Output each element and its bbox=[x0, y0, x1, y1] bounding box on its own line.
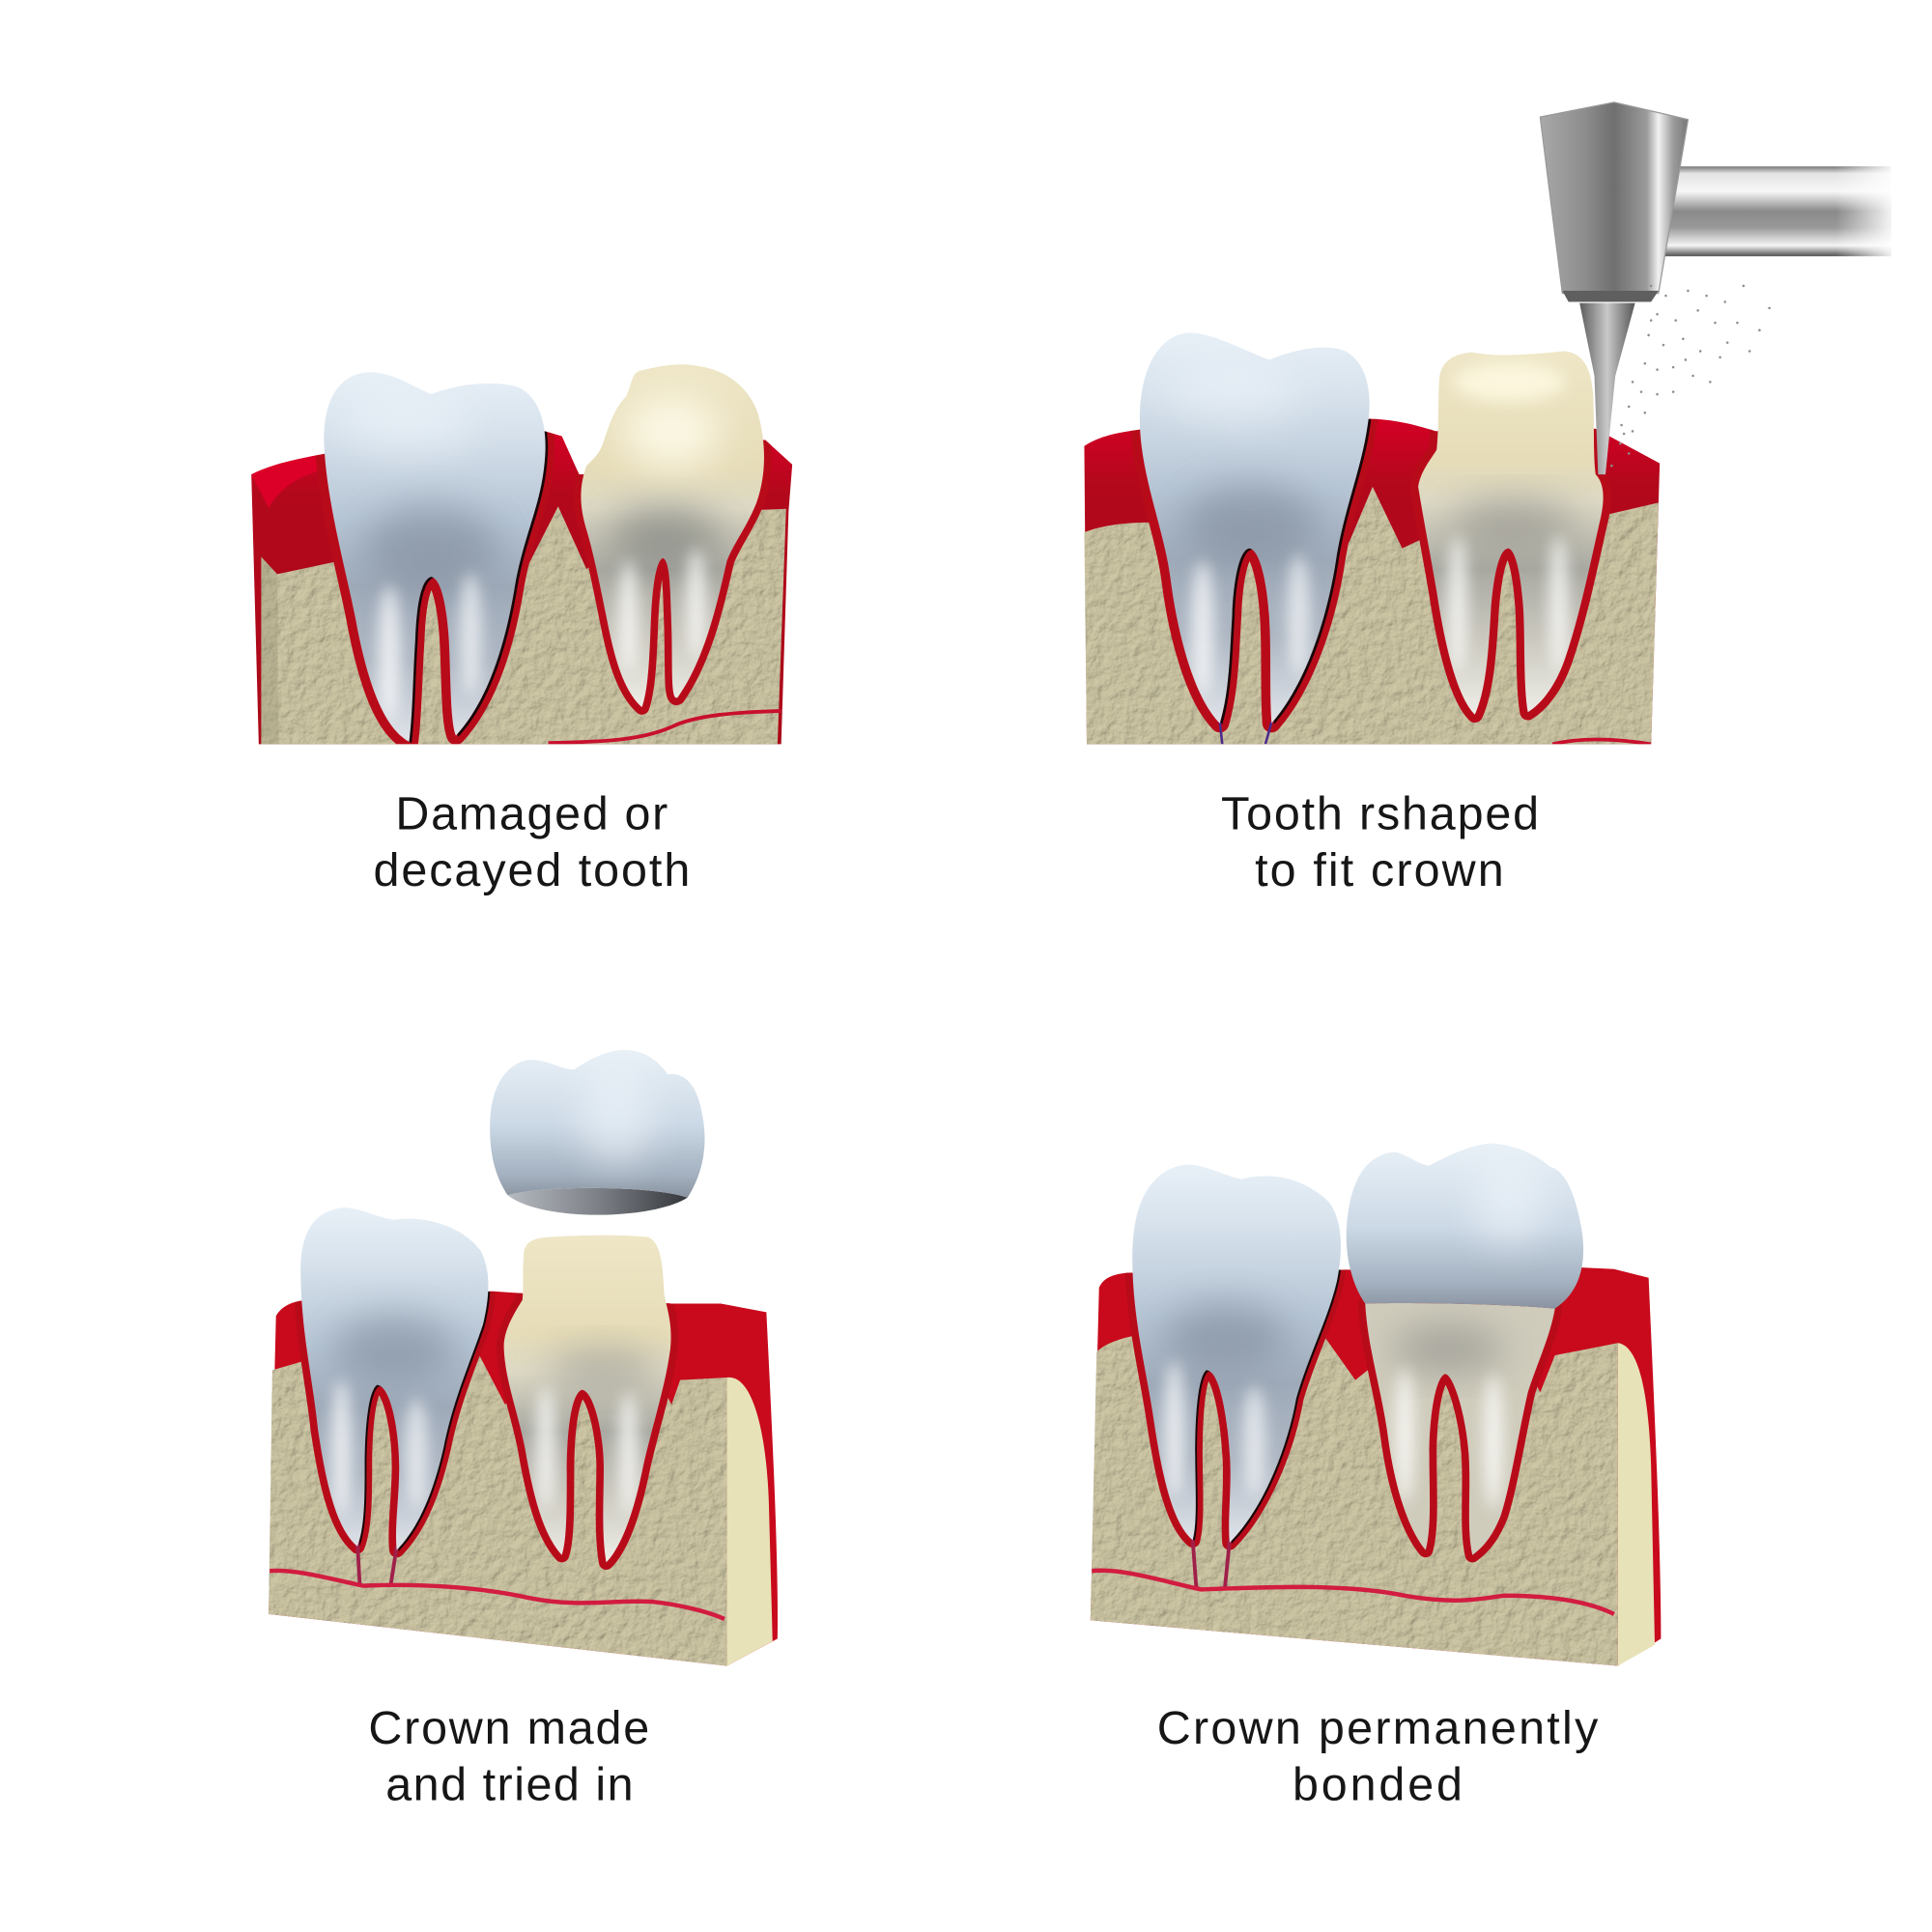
nerve line bbox=[1092, 1571, 1614, 1614]
caption: damaged or decayed tooth bbox=[373, 787, 690, 896]
panel: crown permanently bonded bbox=[1091, 1144, 1661, 1665]
jaw bone bbox=[261, 506, 786, 744]
bone side face bbox=[727, 1378, 773, 1665]
icon: dental drill bbox=[1540, 102, 1897, 474]
healthy molar bbox=[1140, 332, 1370, 724]
caption: tooth reshaped bbox=[1221, 787, 1539, 896]
gum block bbox=[1091, 1266, 1661, 1665]
socket lining bbox=[1130, 419, 1652, 744]
drill arm bbox=[1658, 166, 1891, 256]
socket lining bbox=[270, 1291, 725, 1621]
jaw bone bbox=[269, 1353, 727, 1665]
caption: tooth reshaped: to fit crown bbox=[1255, 844, 1504, 896]
drill burr bbox=[1579, 303, 1635, 474]
healthy molar bbox=[300, 1208, 488, 1550]
caption: crown permanently bonded: Crown permanently bbox=[1157, 1702, 1599, 1754]
infographic canvas bbox=[251, 101, 1891, 1801]
bone side face bbox=[1618, 1343, 1655, 1665]
gum block bbox=[269, 1292, 778, 1665]
caption: tooth reshaped: Tooth rshaped bbox=[1221, 787, 1539, 839]
nerve line bbox=[269, 1571, 724, 1619]
bonded crown bbox=[1347, 1144, 1583, 1309]
caption: crown permanently bonded: bonded bbox=[1293, 1759, 1463, 1811]
bonded tooth root bbox=[1365, 1303, 1555, 1555]
socket lining bbox=[315, 431, 781, 744]
gum block bbox=[1084, 419, 1660, 744]
caption: damaged or decayed tooth: Damaged or bbox=[395, 787, 668, 839]
debris particles bbox=[1611, 286, 1770, 466]
caption: crown made and tried in: Crown made bbox=[368, 1702, 649, 1754]
jaw bone bbox=[1091, 1333, 1618, 1665]
healthy molar bbox=[1132, 1164, 1341, 1543]
gum block bbox=[251, 431, 792, 744]
prepared tooth bbox=[504, 1236, 671, 1562]
caption: crown made and tried in bbox=[368, 1702, 649, 1811]
prepared tooth bbox=[1418, 352, 1604, 715]
bone side strip bbox=[261, 557, 278, 744]
drill head bbox=[1540, 102, 1688, 294]
caption: crown permanently bonded bbox=[1157, 1702, 1599, 1811]
crown cap bbox=[490, 1050, 705, 1215]
gum highlight bbox=[251, 453, 330, 508]
panel: damaged or decayed tooth bbox=[251, 364, 792, 744]
caption: damaged or decayed tooth: decayed tooth bbox=[373, 844, 690, 896]
panel: tooth reshaped bbox=[1084, 102, 1897, 744]
jaw bone bbox=[1084, 487, 1659, 744]
caption: crown made and tried in: and tried in bbox=[385, 1759, 634, 1811]
healthy molar bbox=[324, 372, 546, 742]
panel: crown made and tried in bbox=[269, 1050, 778, 1665]
socket lining bbox=[1092, 1269, 1615, 1616]
decayed tooth bbox=[581, 364, 764, 707]
nerve line bbox=[549, 711, 781, 743]
